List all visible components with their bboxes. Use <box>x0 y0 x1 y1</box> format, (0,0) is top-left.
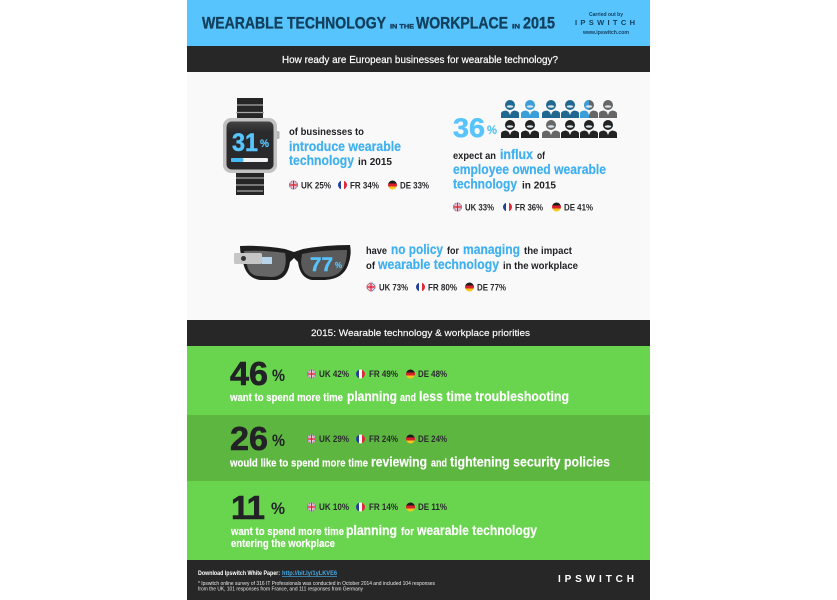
stat: 46%: 46 <box>230 355 268 392</box>
header banner <box>187 0 650 46</box>
text: no policy for managing the impact: managing <box>463 241 520 257</box>
description: planning <box>346 522 397 538</box>
stat: 11%: % <box>271 499 285 518</box>
description: wearable technology <box>416 522 537 538</box>
title: WEARABLE TECHNOLOGY <box>202 14 386 32</box>
country figures: 31% row: UK 25% <box>301 180 331 190</box>
country figures: UK 42% <box>319 369 349 379</box>
text: no policy for managing the impact <box>366 241 578 272</box>
country figures: DE 11% <box>418 502 447 512</box>
description: for <box>401 526 415 538</box>
text: no policy for managing the impact: in the workplace <box>503 260 578 272</box>
text: no policy for managing the impact: for <box>447 245 459 257</box>
icon: smart glasses showing 77%: 77 <box>310 254 333 276</box>
description: would like to spend more time <box>229 458 368 470</box>
country figures <box>307 502 447 512</box>
footnote: from the UK, 101 responses from France, and 111 responses from Germany <box>198 586 363 592</box>
text: no policy for managing the impact: the impact <box>524 245 572 257</box>
country figures: FR 49% <box>369 369 398 379</box>
icon: smart watch showing 31%: % <box>260 138 269 150</box>
panel: 11% priority <box>187 481 650 560</box>
icon: smart glasses showing 77%: % <box>335 260 342 270</box>
description: planning <box>347 388 397 404</box>
description: less time troubleshooting <box>419 388 569 404</box>
icon: smart watch showing 31%: 31 <box>232 129 258 157</box>
country figures: FR 14% <box>369 502 398 512</box>
text: expect an influx of employee owned wearable technology: of <box>537 150 545 162</box>
logo: Ipswitch: IPSWITCH <box>558 574 634 585</box>
country figures: 77% row: FR 80% <box>428 282 457 292</box>
text: 31% of businesses to introduce wearable technology: in 2015 <box>358 156 392 168</box>
country figures: 77% row: UK 73% <box>379 282 408 292</box>
country figures: 31% row <box>289 180 429 190</box>
title: 2015 <box>523 14 555 32</box>
text: expect an influx of employee owned wearable technology: employee owned wearable <box>453 161 606 177</box>
description: entering the workplace <box>231 538 335 550</box>
stat: 26% <box>230 420 285 457</box>
country figures: 31% row: DE 33% <box>400 180 429 190</box>
footer <box>187 560 650 600</box>
country figures: 31% row: FR 34% <box>350 180 379 190</box>
title: IN THE <box>390 24 415 30</box>
text: 31% of businesses to introduce wearable technology: of businesses to <box>289 126 364 138</box>
text: expect an influx of employee owned wearable technology: expect an <box>453 150 496 162</box>
description <box>230 522 537 550</box>
stat: 26%: % <box>272 431 285 450</box>
country figures: 36% row: FR 36% <box>515 202 543 212</box>
icon: smart watch showing 31% <box>223 98 280 195</box>
text: no policy for managing the impact: have <box>366 245 387 257</box>
country figures: FR 24% <box>369 434 398 444</box>
text: expect an influx of employee owned wearable technology: influx <box>500 146 533 162</box>
section heading: readiness <box>187 46 650 72</box>
country figures: UK 29% <box>319 434 349 444</box>
title: IN <box>512 24 520 30</box>
description: want to spend more time <box>229 392 343 404</box>
text: expect an influx of employee owned wearable technology <box>453 146 606 192</box>
country figures <box>307 369 447 379</box>
section heading: priorities: 2015: Wearable technology & workplace priorities <box>311 328 530 339</box>
stat: 11% <box>231 489 285 526</box>
footnote: * Ipswitch online survey of 316 IT Professionals was conducted in October 2014 and included 104 responses <box>198 581 435 587</box>
stat: 11%: 11 <box>231 489 265 526</box>
download link: Download Ipswitch White Paper: <box>198 570 280 577</box>
icon: grid of employees <box>501 100 617 138</box>
panel: 46% priority <box>187 346 650 415</box>
stat: 26%: 26 <box>230 420 268 457</box>
country figures: 36% row: UK 33% <box>465 202 494 212</box>
country figures: DE 48% <box>418 369 447 379</box>
download link: http://bit.ly/1yLKVE6 <box>282 570 337 577</box>
title <box>202 14 555 32</box>
text: expect an influx of employee owned wearable technology: in 2015 <box>522 180 556 192</box>
text: no policy for managing the impact: no policy <box>391 241 443 257</box>
description: reviewing <box>371 454 427 470</box>
text: expect an influx of employee owned wearable technology: technology <box>453 176 517 192</box>
country figures: 77% row <box>366 282 506 292</box>
section heading: priorities <box>187 320 650 346</box>
stat: 36%: % <box>487 123 497 137</box>
country figures: UK 10% <box>319 502 349 512</box>
description <box>229 388 569 404</box>
title: WORKPLACE <box>416 14 508 32</box>
panel: 26% priority <box>187 415 650 481</box>
survey credit: IPSWITCH <box>575 18 635 27</box>
text: no policy for managing the impact: of <box>366 260 375 272</box>
icon: smart glasses showing 77% <box>234 245 351 280</box>
country figures: 77% row: DE 77% <box>477 282 506 292</box>
panel: readiness background <box>187 72 650 320</box>
description <box>229 454 610 470</box>
description: tightening security policies <box>450 454 610 470</box>
country figures <box>307 434 447 444</box>
country figures: 36% row: DE 41% <box>564 202 593 212</box>
survey credit: Carried out by <box>589 12 624 18</box>
description: want to spend more time <box>230 526 344 538</box>
stat: 46%: % <box>272 366 285 385</box>
stat: 46% <box>230 355 285 392</box>
stat: 36% <box>453 113 497 143</box>
country figures: 36% row <box>453 202 593 212</box>
description: and <box>400 392 416 404</box>
text: 31% of businesses to introduce wearable technology <box>289 126 401 168</box>
section heading: readiness: How ready are European businesses for wearable technology? <box>282 54 558 66</box>
text: no policy for managing the impact: wearable technology <box>377 256 499 272</box>
country figures: DE 24% <box>418 434 447 444</box>
description: and <box>431 458 447 470</box>
text: 31% of businesses to introduce wearable technology: technology <box>289 152 354 168</box>
survey credit: www.ipswitch.com <box>582 30 630 36</box>
stat: 36%: 36 <box>453 113 485 143</box>
footnote <box>198 581 435 592</box>
survey credit <box>575 12 635 36</box>
text: 31% of businesses to introduce wearable technology: introduce wearable <box>289 138 401 154</box>
